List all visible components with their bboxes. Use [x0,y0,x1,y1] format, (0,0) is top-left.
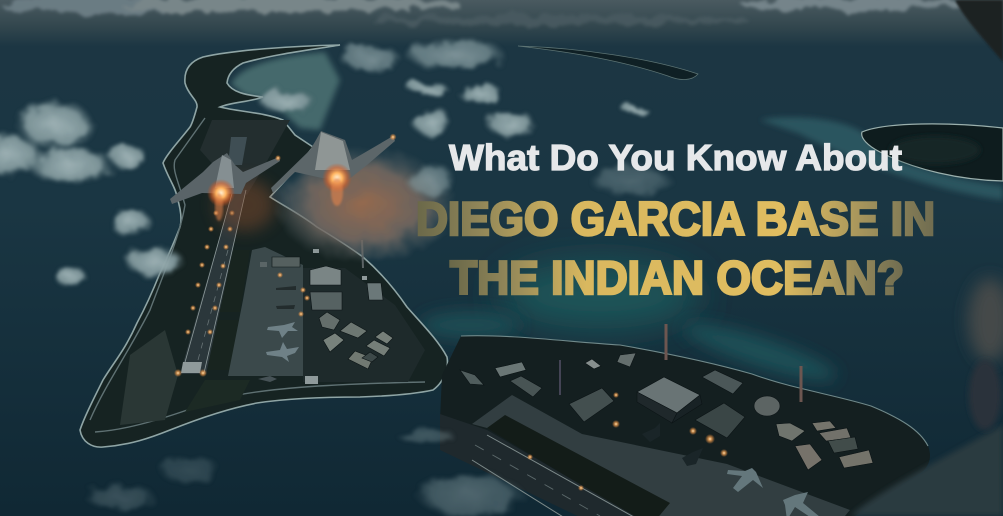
heading line: Indian Ocean: THE INDIAN OCEAN? [450,251,904,304]
apron [472,395,850,516]
parked aircraft [642,423,820,516]
island landmass [80,45,447,447]
heading line: Diego Garcia: DIEGO GARCIA BASE IN [416,192,935,245]
apron [228,247,303,376]
heading line: intro: What Do You Know About [449,137,902,178]
small buildings [260,249,367,384]
landmass [440,336,930,516]
distant atoll arc [518,46,698,80]
radio mast [362,240,363,268]
coastal road [90,118,425,432]
jet exhaust smoke [215,147,457,263]
vegetation patches [120,330,178,425]
hangars [272,257,393,369]
sky and horizon clouds [0,0,960,25]
clouds [0,38,672,516]
aircraft window frame foreground [850,0,1003,516]
jet one [170,153,281,221]
distant island on the right [862,124,1003,181]
main island [80,45,447,447]
shoreline [461,336,928,446]
northern airfield [200,120,290,195]
base ground [303,268,425,382]
jet two [271,131,396,206]
grass strip [487,415,670,516]
apron lights [527,392,728,516]
runway lights [174,210,310,377]
radio masts [664,324,668,360]
lower right island [440,324,930,516]
jets [170,131,396,221]
title text [416,137,935,304]
grass strips [216,250,250,312]
main runway [180,190,246,374]
shallow lagoon and reef water [231,52,1003,390]
parked aircraft [258,286,299,382]
buildings [460,353,873,470]
runway threshold [181,362,202,373]
lower runway [440,414,645,516]
